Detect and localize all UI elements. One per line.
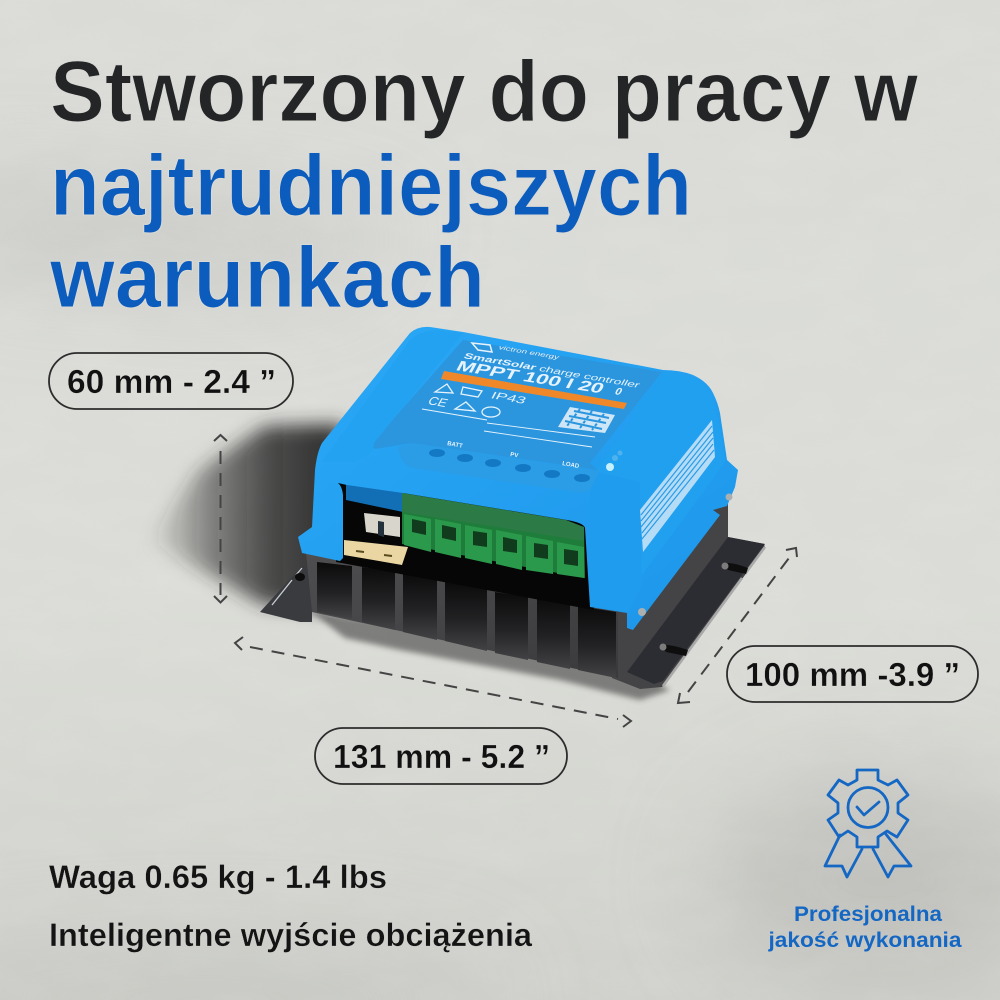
caption: professional workmanship: jakość wykonania — [767, 929, 962, 952]
device label text: SmartSolar charge controller — [462, 351, 642, 389]
pill: length: 131 mm - 5.2 ” — [333, 739, 550, 776]
port labels: LOAD — [562, 461, 580, 470]
fuse — [344, 513, 408, 565]
arrow: length — [235, 637, 631, 727]
device label text: victron energy — [497, 345, 561, 361]
lid left strip highlight — [322, 330, 463, 462]
pill: height: 60 mm - 2.4 ” — [67, 364, 276, 401]
product: solar charge controller — [260, 327, 765, 689]
pill: depth — [727, 646, 978, 702]
ventilation label — [640, 420, 715, 552]
pill: depth: 100 mm -3.9 ” — [745, 657, 960, 694]
device label text — [422, 343, 642, 482]
title — [49, 44, 919, 326]
device label text: 0 — [613, 386, 624, 398]
load output text: Inteligentne wyjście obciążenia — [49, 917, 532, 953]
arrow: height — [214, 435, 227, 602]
lid top face — [372, 340, 662, 470]
pill: length — [315, 728, 567, 784]
mounting plate left — [260, 566, 312, 622]
port labels: BATT — [447, 441, 463, 450]
green terminal block — [402, 493, 585, 578]
heat sink front — [306, 553, 618, 678]
heat sink right side — [612, 490, 765, 689]
device label text: IP43 — [489, 390, 528, 406]
port labels: PV — [510, 452, 519, 459]
port strip — [398, 443, 600, 492]
lid right shoulder — [590, 372, 725, 590]
port screws — [429, 449, 590, 482]
title: Stworzony do pracy w — [50, 44, 919, 140]
device label text: MPPT 100 I 20 — [453, 359, 607, 397]
pill: height — [49, 353, 293, 409]
blue lid — [298, 327, 738, 630]
screws — [726, 494, 732, 500]
heat sink fins — [317, 562, 616, 678]
title: najtrudniejszych — [50, 138, 692, 234]
orange band — [441, 371, 627, 409]
device shadow — [150, 424, 670, 700]
terminal cavity — [336, 480, 594, 610]
icon: quality gear badge — [825, 770, 911, 877]
caption: professional workmanship: Profesjonalna — [794, 903, 942, 926]
title: warunkach — [49, 230, 485, 326]
front panel — [590, 470, 642, 612]
device label text: CE — [426, 394, 451, 410]
port labels — [447, 441, 580, 470]
weight text: Waga 0.65 kg - 1.4 lbs — [49, 859, 387, 895]
arrow: depth — [678, 548, 797, 703]
caption: professional workmanship — [767, 903, 962, 952]
status leds — [606, 463, 614, 471]
qr code — [558, 407, 615, 433]
